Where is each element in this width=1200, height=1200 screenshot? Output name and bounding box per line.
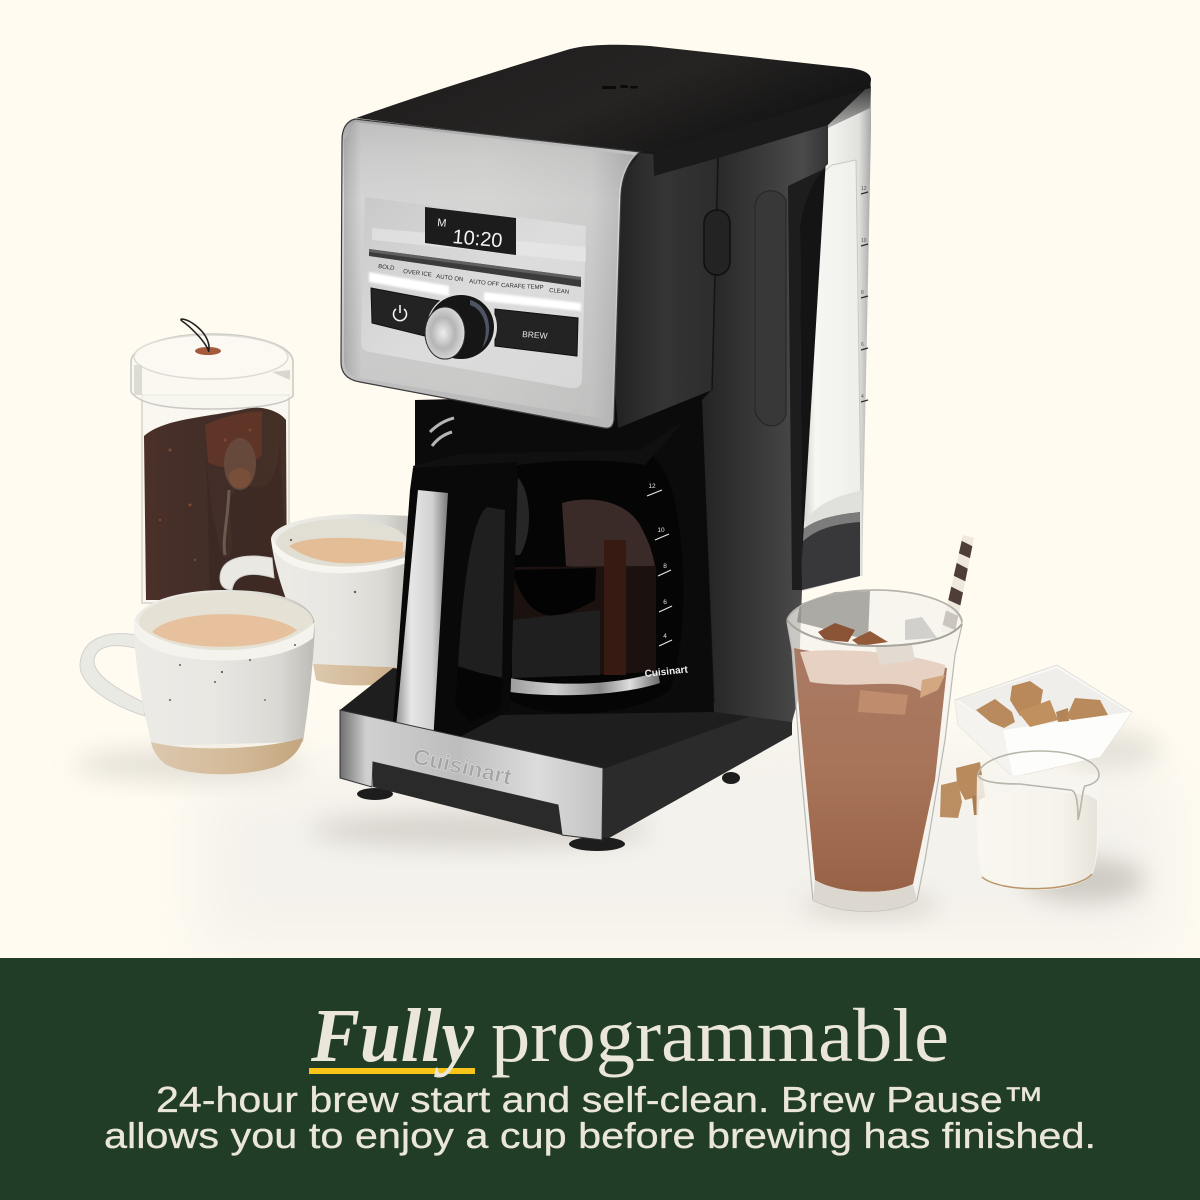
- water tank: 10: [861, 238, 867, 244]
- clock display: 10:20: [452, 226, 503, 252]
- function labels: AUTO ON: [436, 274, 464, 283]
- heading: [310, 994, 949, 1078]
- indicator strip: [369, 249, 581, 287]
- steel front panel: [341, 119, 640, 428]
- water tank: 8: [861, 290, 864, 296]
- machine dark backing: [600, 125, 828, 770]
- sugar cubes in bowl: [976, 681, 1108, 728]
- brew button: [495, 309, 578, 356]
- lid: [413, 420, 685, 485]
- glass carafe: [392, 420, 689, 745]
- sugar bowl: [955, 665, 1132, 777]
- glass carafe: 12: [648, 483, 656, 490]
- handle: [392, 462, 518, 745]
- brew reflection: [562, 499, 655, 570]
- dark seen through glass: [797, 591, 870, 640]
- background: [0, 0, 1200, 960]
- feet: [357, 772, 740, 851]
- water tank: [790, 84, 871, 592]
- glass carafe: 4: [663, 633, 667, 640]
- selector knob: [425, 293, 497, 361]
- milk jug: [977, 751, 1099, 890]
- heading: programmable: [491, 994, 949, 1078]
- brand wordmark: Cuisinart: [411, 743, 515, 790]
- water tank: 4: [861, 394, 864, 400]
- lid knob with loop: [181, 319, 221, 355]
- lid overhang: [653, 84, 871, 176]
- function labels: AUTO OFF: [469, 279, 500, 288]
- silver band: [510, 672, 660, 695]
- glass carafe: 8: [663, 563, 667, 570]
- glass rim: [787, 590, 962, 622]
- top lid: [356, 45, 871, 153]
- base side: [602, 690, 792, 842]
- body text: 24-hour brew start and self-clean. Brew Pause™: [156, 1079, 1044, 1120]
- loose sugar cubes: [940, 762, 985, 818]
- latte: [794, 648, 947, 892]
- water tank: 12: [861, 186, 867, 192]
- tank measure marks: [861, 192, 868, 402]
- jar lid: [131, 334, 293, 409]
- brew cavity: [415, 388, 714, 715]
- body text: [104, 1079, 1096, 1156]
- function labels: CARAFE TEMP: [501, 283, 544, 291]
- brew head side: [608, 153, 718, 428]
- glass carafe: 10: [657, 527, 665, 534]
- clock display: [425, 207, 516, 255]
- coffee maker: [340, 45, 871, 851]
- iced coffee glass: [787, 530, 980, 911]
- side button: [704, 210, 730, 275]
- body text: allows you to enjoy a cup before brewing has finished.: [104, 1115, 1096, 1156]
- clock display: M: [437, 217, 447, 230]
- carafe body: [508, 450, 684, 713]
- control recess: [361, 197, 586, 388]
- ice cubes: [818, 617, 937, 665]
- water tank: 6: [861, 342, 864, 348]
- tower oval inset: [755, 191, 786, 426]
- ground coffee: [144, 408, 287, 600]
- function labels: CLEAN: [549, 288, 569, 296]
- function labels: [378, 264, 569, 296]
- mug handle: [80, 634, 145, 716]
- carafe measure marks: [647, 490, 672, 646]
- glass carafe: Cuisinart: [644, 664, 689, 680]
- jar of ground coffee: [131, 319, 293, 603]
- heading underline: [309, 1068, 475, 1074]
- banner: [0, 958, 1200, 1200]
- base top: [340, 668, 790, 769]
- brew button: BREW: [522, 329, 548, 341]
- front mug: [80, 590, 315, 774]
- straw: [942, 535, 974, 630]
- button highlights: [369, 272, 449, 296]
- glass carafe: 6: [663, 599, 667, 606]
- handle shadow strip: [788, 168, 826, 590]
- glass outline: [787, 590, 962, 911]
- water reservoir bottom: [800, 490, 862, 590]
- function labels: BOLD: [378, 264, 395, 272]
- heading: Fully: [310, 994, 474, 1078]
- table surface and shadows: [75, 720, 1170, 950]
- power button: [371, 288, 440, 336]
- back mug: [220, 514, 412, 685]
- function labels: OVER ICE: [403, 269, 432, 278]
- steel base front: [340, 710, 603, 840]
- bottom of glass: [813, 880, 917, 911]
- water tower: [702, 125, 828, 722]
